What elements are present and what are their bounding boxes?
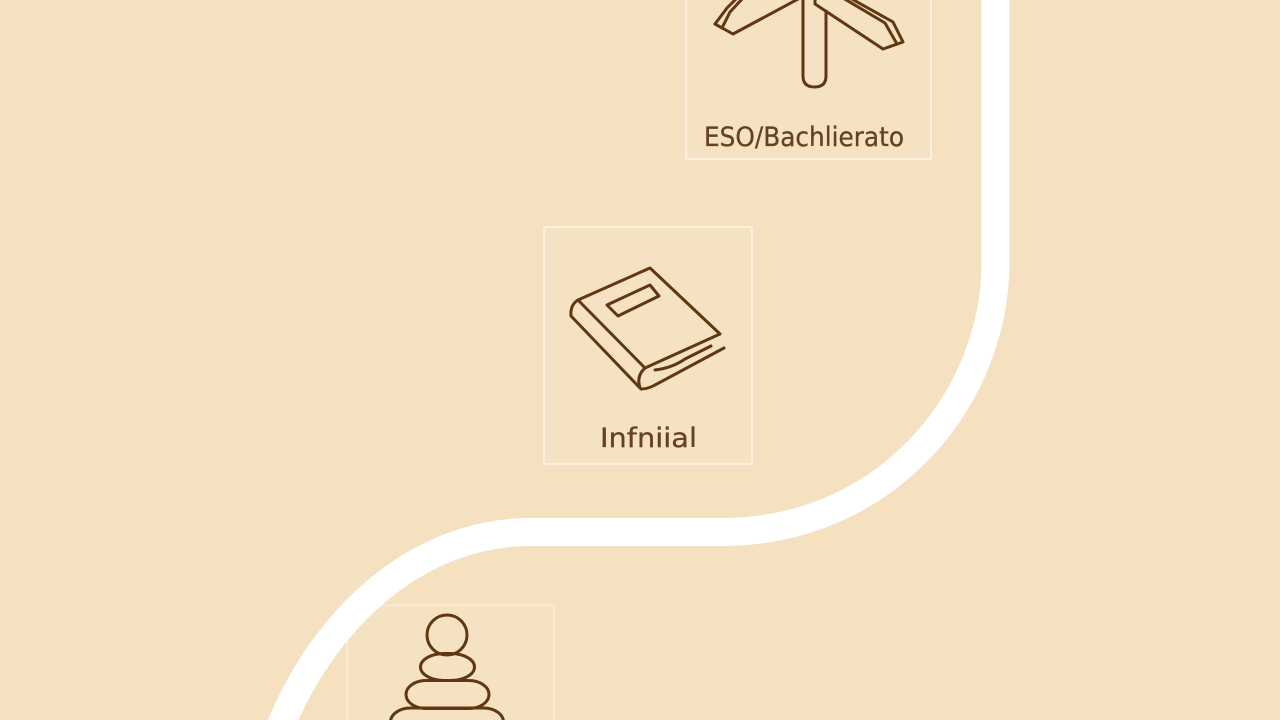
winding white path [279,0,996,720]
panel frame [686,0,931,159]
label: ESO/Bachlierato: ESO/Bachlierato [704,122,904,153]
panel: Infantil [544,227,752,464]
icon: book [571,268,724,389]
icon: ring stack toy [390,615,504,720]
panel frame [544,227,752,464]
label: Infniial: Infniial [600,423,697,454]
icon: signpost [715,0,903,87]
panel: ESO/Bachillerato [686,0,931,159]
panel frame [347,606,554,720]
panel: stacking rings [347,606,554,720]
